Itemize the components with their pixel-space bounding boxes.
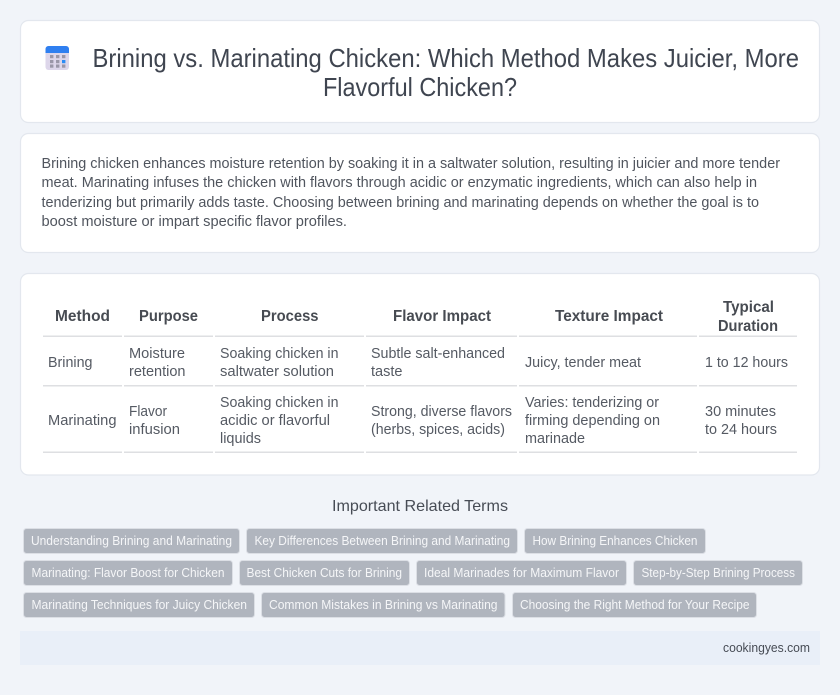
title: Flavorful Chicken? (323, 74, 517, 102)
table header row: Texture Impact (555, 308, 664, 325)
panel: related term tags: Ideal Marinades for Maximum Flavor (424, 565, 620, 580)
table row: brining: Moisture (129, 346, 185, 362)
table row: brining: saltwater solution (220, 364, 334, 380)
table row: brining: Juicy, tender meat (525, 355, 641, 371)
panel: introduction text: Brining chicken enhances moisture retention by soaking it in a saltwater solution, resulting in juicier and more tender (42, 156, 780, 172)
panel: comparison table (20, 274, 820, 475)
table row: marinating: acidic or flavorful (220, 413, 330, 429)
table row: brining: retention (129, 364, 186, 380)
table row: marinating: Flavor (129, 404, 167, 420)
panel: title card (20, 20, 820, 122)
panel: introduction text: boost moisture or impart specific flavor profiles. (42, 214, 347, 230)
title (92, 45, 799, 102)
table row: brining: Brining (48, 355, 92, 371)
panel: related term tags: Understanding Brining and Marinating (31, 533, 232, 548)
icon: calendar (46, 46, 69, 70)
table row: brining: taste (371, 364, 402, 380)
table row: brining: Subtle salt-enhanced (371, 346, 505, 362)
footer bar: cookingyes.com (723, 640, 810, 655)
table row: brining: 1 to 12 hours (705, 355, 788, 371)
table row: marinating: Varies: tenderizing or (525, 395, 659, 411)
table row: marinating: infusion (129, 422, 180, 438)
table row: marinating: marinade (525, 431, 585, 447)
panel: introduction text: tenderizing but primarily adds taste. Choosing between brining and marinating depends on whether the goal is to (42, 195, 759, 211)
table header row: Process (261, 308, 319, 325)
table header row: Typical (723, 299, 774, 316)
panel: related term tags: Best Chicken Cuts for Brining (246, 565, 402, 580)
table row: marinating: (herbs, spices, acids) (371, 422, 505, 438)
footer bar (20, 631, 820, 665)
table header row: Method (55, 308, 110, 325)
table header row (43, 299, 797, 337)
panel: related term tags: Step-by-Step Brining Process (642, 565, 795, 580)
table row: marinating: Soaking chicken in (220, 395, 338, 411)
heading: important related terms: Important Related Terms (332, 498, 508, 515)
title: Brining vs. Marinating Chicken: Which Method Makes Juicier, More (92, 45, 799, 73)
panel: related term tags: Key Differences Between Brining and Marinating (254, 533, 510, 548)
table row: marinating: to 24 hours (705, 422, 777, 438)
table row: marinating: liquids (220, 431, 261, 447)
table row: brining (43, 346, 797, 386)
table header row: Flavor Impact (393, 308, 492, 325)
panel: related term tags: Choosing the Right Method for Your Recipe (520, 597, 750, 612)
table row: marinating: Marinating (48, 413, 116, 429)
panel: related term tags: Marinating: Flavor Boost for Chicken (32, 565, 224, 580)
table header row: Duration (718, 318, 778, 335)
table row: marinating: Strong, diverse flavors (371, 404, 512, 420)
panel: introduction text: meat. Marinating infuses the chicken with flavors through acidic or enzymatic ingredients, which can also help in (42, 175, 757, 191)
table row: marinating: firming depending on (525, 413, 660, 429)
table header row: Purpose (139, 308, 198, 325)
table row: marinating: 30 minutes (705, 404, 776, 420)
panel: related term tags: Marinating Techniques for Juicy Chicken (32, 597, 247, 612)
panel: related term tags: How Brining Enhances Chicken (532, 533, 698, 548)
table row: brining: Soaking chicken in (220, 346, 338, 362)
panel: introduction text (20, 134, 820, 252)
table row: marinating (43, 395, 797, 453)
panel: related term tags (24, 528, 802, 618)
panel: related term tags: Common Mistakes in Brining vs Marinating (269, 597, 498, 612)
